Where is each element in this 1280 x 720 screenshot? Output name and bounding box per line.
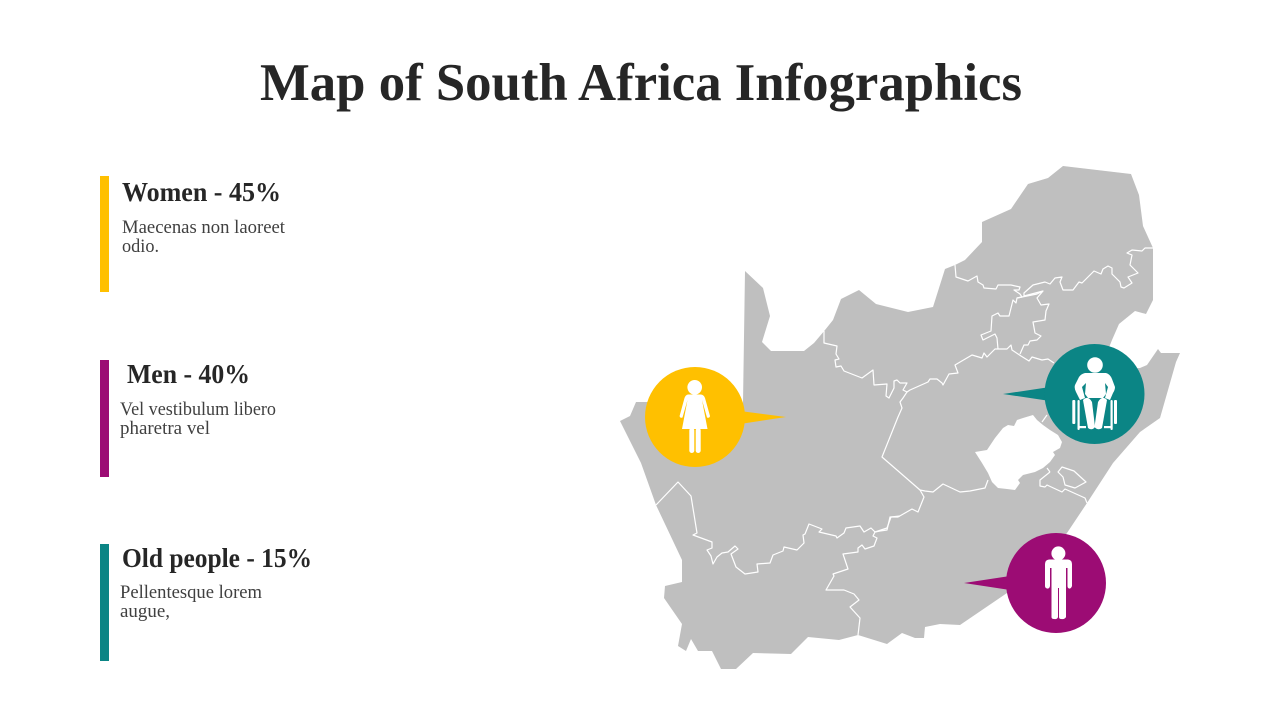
circle: old people — [1044, 344, 1144, 444]
Lesotho cut-out — [975, 415, 1062, 490]
heading: women: Women - 45% — [122, 177, 281, 207]
text: women description: odio. — [122, 237, 159, 257]
icon: woman — [680, 380, 710, 453]
text: men description: pharetra vel — [120, 419, 210, 439]
pointer: old people — [1003, 387, 1050, 401]
callout: women — [645, 367, 786, 467]
panel: men — [100, 359, 276, 477]
text: women description: Maecenas non laoreet — [122, 218, 286, 238]
accent bar: men — [100, 360, 109, 477]
icon: man — [1045, 546, 1072, 619]
circle: men — [1006, 533, 1106, 633]
map silhouette — [620, 166, 1180, 669]
heading: old people: Old people - 15% — [122, 543, 312, 573]
panel: women — [100, 176, 286, 292]
circle: women — [645, 367, 745, 467]
callout: old people — [1003, 344, 1144, 444]
heading: men: Men - 40% — [127, 359, 250, 389]
icon: person in wheelchair — [1072, 357, 1117, 430]
title: Map of South Africa Infographics — [260, 54, 1022, 112]
text: men description: Vel vestibulum libero — [120, 400, 276, 420]
accent bar: women — [100, 176, 109, 292]
province borders — [656, 248, 1153, 635]
panel: old people — [100, 543, 312, 661]
text: old people description: augue, — [120, 602, 170, 622]
pointer: women — [740, 411, 786, 424]
text: old people description: Pellentesque lorem — [120, 583, 263, 603]
map of South Africa — [620, 166, 1180, 669]
pointer: men — [964, 576, 1010, 590]
accent bar: old people — [100, 544, 109, 661]
callout: men — [964, 533, 1106, 633]
